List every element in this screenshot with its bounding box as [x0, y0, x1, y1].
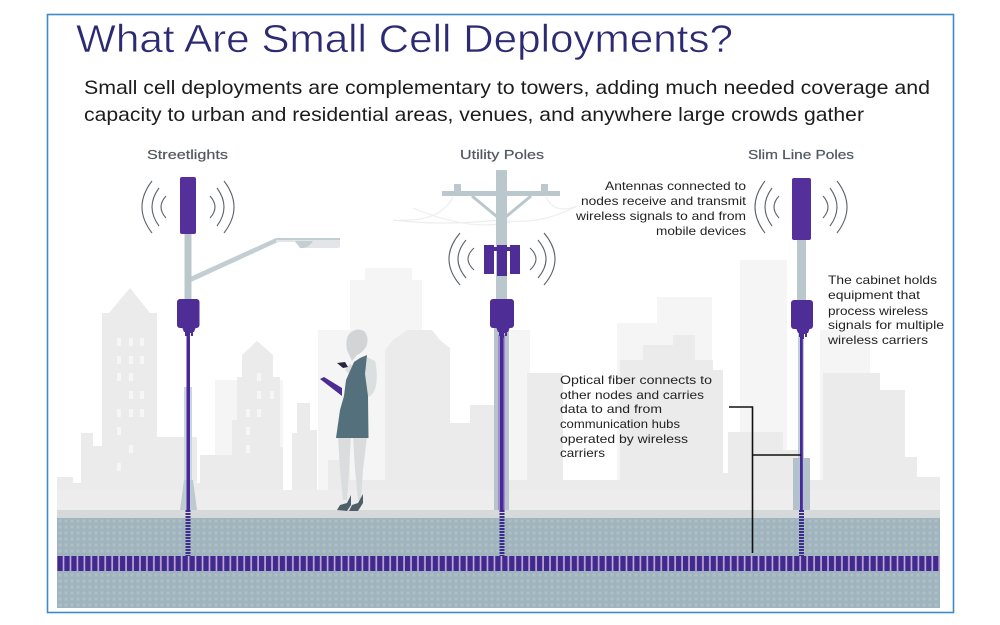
crossarm: [442, 191, 560, 196]
intro text: [84, 77, 930, 126]
title: What Are Small Cell Deployments?: [76, 18, 733, 61]
head: [346, 330, 368, 361]
intro text: Small cell deployments are complementary to towers, adding much needed coverage and: [84, 77, 930, 99]
callout: optical fiber: data to and from: [560, 402, 662, 416]
fiber: [498, 335, 505, 510]
callout: optical fiber: carriers: [560, 446, 605, 460]
utility pole: [393, 170, 577, 556]
person with phone: [320, 330, 377, 511]
base: [793, 458, 810, 510]
callout: antennas: [575, 179, 747, 238]
legs: [338, 437, 367, 500]
antenna: [484, 245, 520, 276]
tablet: [320, 377, 342, 396]
antenna: [180, 177, 196, 234]
fiber conduit: [57, 556, 940, 571]
ground strip: [57, 490, 940, 510]
callout: cabinet: equipment that: [828, 288, 921, 302]
callout: antennas: Antennas connected to: [605, 179, 746, 193]
pale background buildings: [215, 260, 870, 490]
callout: optical fiber: communication hubs: [560, 417, 680, 431]
callout: optical fiber: operated by wireless: [560, 432, 688, 446]
pole labels: Slim Line Poles: [748, 148, 854, 162]
overhead wires: [393, 197, 577, 225]
callout: cabinet: process wireless: [828, 304, 928, 318]
callout: cabinet: signals for multiple: [828, 318, 944, 332]
callout: optical fiber: other nodes and carries: [560, 388, 704, 402]
callout: antennas: nodes receive and transmit: [581, 194, 747, 208]
streetlight pole: [142, 177, 340, 556]
base: [180, 480, 197, 510]
cabinet: [791, 300, 813, 329]
pole labels: [147, 148, 854, 162]
cabinet: [490, 299, 514, 328]
leader lines: [729, 407, 801, 553]
city skyline: [57, 260, 940, 510]
near buildings: [57, 288, 940, 510]
arm: [345, 357, 377, 397]
cabinet: [177, 299, 200, 328]
callout: antennas: mobile devices: [656, 224, 746, 238]
fiber: [186, 330, 190, 510]
callout: cabinet: The cabinet holds: [828, 273, 937, 287]
street lamp arm: [190, 238, 278, 282]
shoes: [337, 494, 363, 511]
callout: cabinet: [827, 273, 944, 347]
pole labels: Streetlights: [147, 148, 228, 162]
slim line pole: [755, 178, 847, 556]
intro text: capacity to urban and residential areas, venues, and anywhere large crowds gather: [84, 104, 865, 126]
building windows: [117, 338, 274, 471]
callout: optical fiber: [560, 373, 712, 460]
pole labels: Utility Poles: [460, 148, 544, 162]
callout: antennas: wireless signals to and from: [575, 209, 746, 223]
callout: optical fiber: Optical fiber connects to: [560, 373, 712, 387]
phone: [337, 362, 348, 368]
fiber: [800, 330, 803, 510]
antenna: [792, 178, 811, 240]
underground soil: [57, 518, 940, 608]
dress: [336, 355, 368, 438]
sidewalk: [57, 510, 940, 518]
callout: cabinet: wireless carriers: [827, 333, 928, 347]
